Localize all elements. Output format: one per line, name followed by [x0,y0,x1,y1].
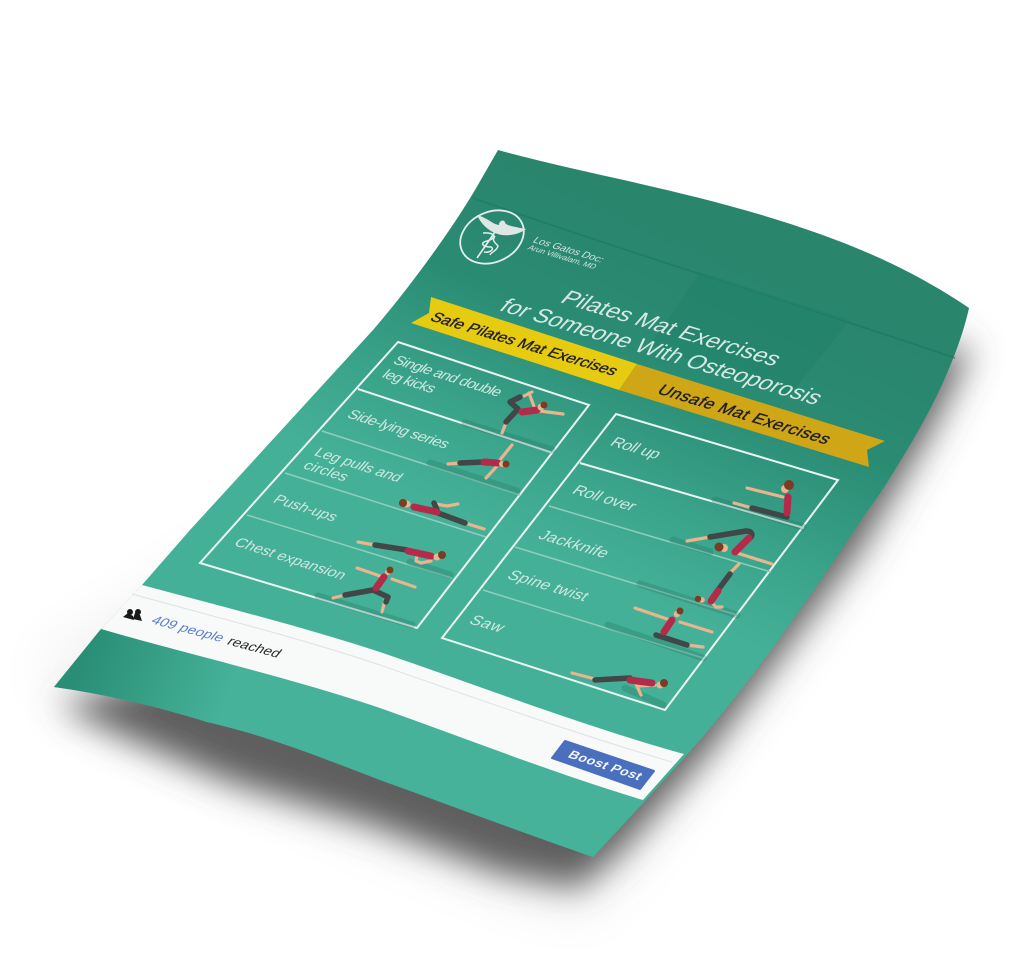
sheet drop shadow [30,300,972,915]
sheet background [54,150,969,857]
icon: people [123,609,142,621]
ribbon: safe exercises [411,297,637,390]
label: spine twist: Spine twist [503,567,593,604]
label: roll over: Roll over [568,482,641,514]
figure: standing bow pose [465,392,563,450]
figure: leg pull [399,499,484,529]
reach count: reached [224,635,284,661]
reach count [148,614,284,661]
label: chest expansion: Chest expansion [230,535,350,583]
ribbon: safe exercises: Safe Pilates Mat Exercises [426,310,622,379]
faint facets [650,272,850,395]
label: roll up: Roll up [606,434,665,462]
label: leg pulls and circles: Leg pulls and [310,445,406,485]
figure: warrior pose [318,566,415,625]
logo text: Arun Villivalam, MD [526,244,599,271]
title: for Someone With Osteoporosis [495,294,829,409]
figure: push-up [358,542,450,575]
figure: jackknife [640,564,739,615]
facebook reach strip [101,585,684,800]
label: saw: Saw [465,612,509,636]
figure: roll over [673,531,772,564]
top fold line [473,198,955,358]
logo: caduceus emblem [452,200,532,274]
ribbon: unsafe exercises: Unsafe Mat Exercises [653,381,836,447]
figure: side plank [430,445,517,491]
label: leg pulls and circles: circles [299,458,353,485]
lower sheet band [40,625,650,870]
panel: safe exercises [200,342,589,628]
boost post button [552,741,654,789]
figure: saw [572,673,668,705]
figure: roll up [715,480,803,527]
reach count: 409 people [148,614,228,645]
label: single and double leg kicks: Single and double [389,353,506,400]
label: single and double leg kicks: leg kicks [378,367,440,396]
boost post button: Boost Post [565,748,646,783]
label: side-lying series: Side-lying series [343,407,454,452]
poster sheet [40,150,969,870]
label: push-ups: Push-ups [269,492,342,525]
figure: spine twist [608,608,712,658]
title: Pilates Mat Exercises [556,286,787,370]
logo text: Los Gatos Doc: [530,236,606,265]
ribbon: unsafe exercises [619,364,885,467]
panel: unsafe exercises [442,414,838,710]
label: jackknife: Jackknife [534,527,613,561]
